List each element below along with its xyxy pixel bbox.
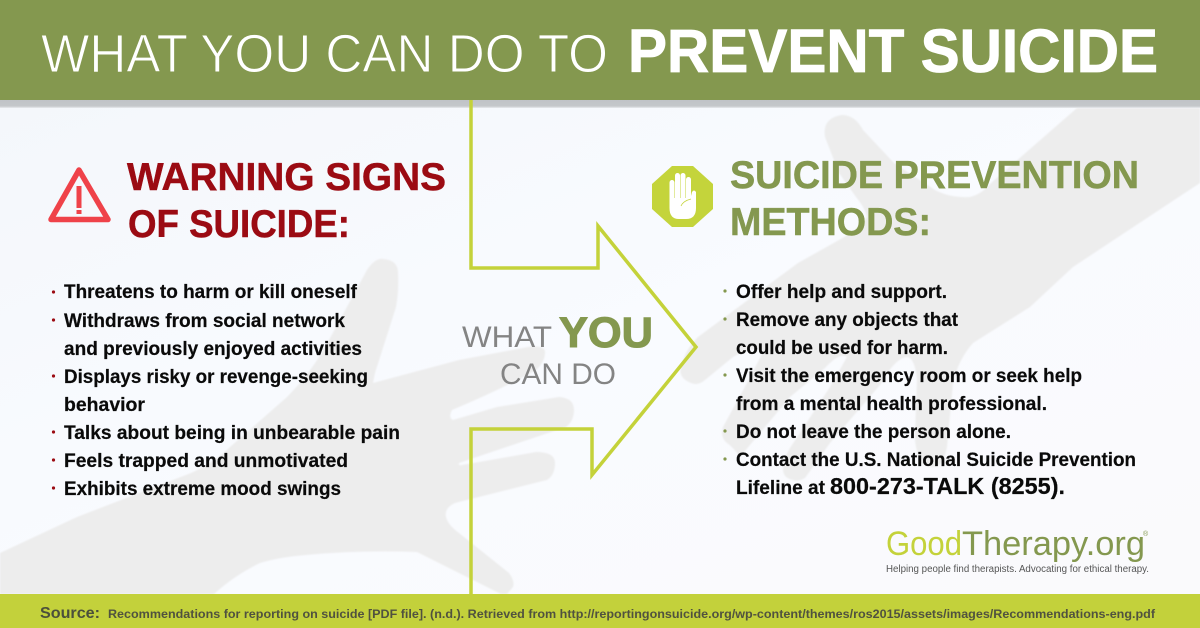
title: light part: WHAT YOU CAN DO TO [41, 24, 608, 84]
list: warning signs: Talks about being in unbearable pain [64, 423, 400, 444]
list: warning signs: Displays risky or revenge-seeking [64, 367, 368, 388]
footer source bar [0, 594, 1200, 628]
list: warning signs [52, 282, 400, 500]
source citation: Recommendations for reporting on suicide [PDF file]. (n.d.). Retrieved from http://reportingonsuicide.org/wp-content/themes/ros2015/assets/images/Recommendations-eng.pdf [108, 609, 1155, 621]
background silhouette: left hand [0, 259, 574, 594]
icon: warning triangle [51, 170, 108, 220]
heading: suicide prevention methods: METHODS: [730, 201, 931, 244]
background [0, 100, 1200, 594]
list: warning signs: behavior [64, 395, 146, 416]
title: bold part: PREVENT SUICIDE [628, 17, 1158, 85]
list: warning signs: Withdraws from social network [64, 311, 345, 332]
heading: warning signs of suicide: WARNING SIGNS [127, 156, 446, 199]
heading: suicide prevention methods: SUICIDE PREVENTION [730, 154, 1139, 197]
background silhouette: right hand [680, 108, 1200, 481]
list: prevention methods: Contact the U.S. National Suicide Prevention [736, 450, 1136, 471]
header banner [0, 0, 1200, 108]
list: prevention methods: Lifeline at [736, 478, 826, 499]
list: prevention methods: Remove any objects that [736, 310, 959, 331]
list: prevention methods: Do not leave the person alone. [736, 422, 1011, 443]
logo: GoodTherapy.org [886, 525, 1149, 575]
arrow label: what you can do: WHAT [462, 321, 552, 354]
list: warning signs: Threatens to harm or kill oneself [64, 282, 358, 303]
icon: stop hand [652, 166, 713, 227]
heading: suicide prevention methods [730, 154, 1139, 244]
list: prevention methods [723, 282, 1136, 499]
list: warning signs: Exhibits extreme mood swings [64, 479, 341, 500]
list: prevention methods: from a mental health professional. [736, 394, 1047, 415]
logo: GoodTherapy.org: Good [886, 525, 962, 563]
logo: GoodTherapy.org: ® [1143, 530, 1149, 538]
source label: Source: [40, 605, 100, 622]
center arrow outline [471, 100, 696, 594]
list: prevention methods: 800-273-TALK (8255). [830, 473, 1065, 499]
heading: warning signs of suicide [127, 156, 446, 246]
list: warning signs: Feels trapped and unmotivated [64, 451, 348, 472]
list: prevention methods: Visit the emergency room or seek help [736, 366, 1082, 387]
logo: GoodTherapy.org: Helping people find therapists. Advocating for ethical therapy. [886, 564, 1149, 575]
arrow label: what you can do: YOU [559, 309, 653, 357]
list: prevention methods: could be used for harm. [736, 338, 948, 359]
panel: warning signs [51, 156, 446, 500]
list: warning signs: and previously enjoyed activities [64, 339, 362, 360]
list: prevention methods: Offer help and support. [736, 282, 947, 303]
arrow label: what you can do: CAN DO [500, 358, 616, 391]
heading: warning signs of suicide: OF SUICIDE: [128, 203, 350, 246]
panel: prevention methods [652, 154, 1139, 499]
arrow label: what you can do [462, 309, 653, 391]
logo: GoodTherapy.org: Therapy.org [962, 525, 1145, 563]
